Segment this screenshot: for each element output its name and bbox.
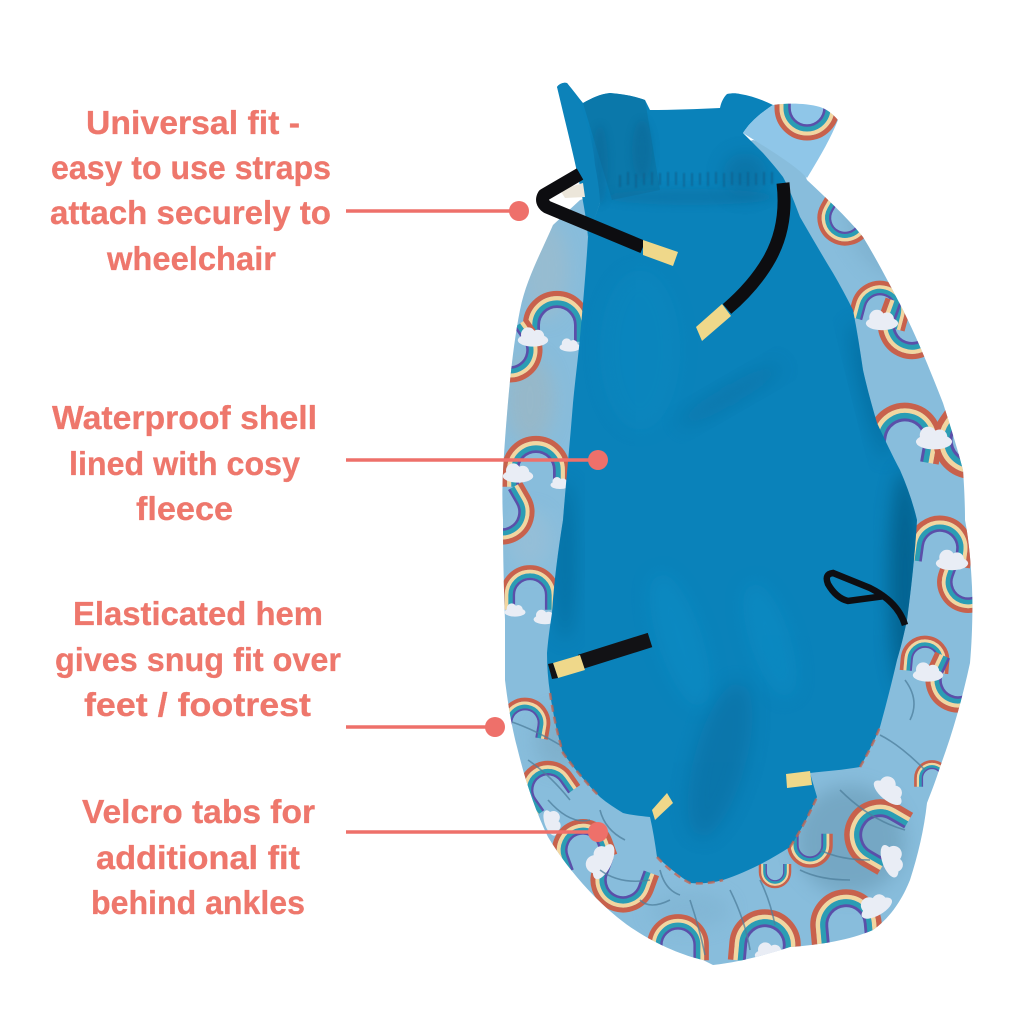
callout: velcro tabs <box>82 793 608 921</box>
pointer line <box>346 717 505 737</box>
top right shell tip <box>743 104 838 178</box>
callout text: Waterproof shell <box>52 399 317 436</box>
callout text <box>50 104 331 277</box>
fleece lining <box>547 83 917 883</box>
strap: upper left <box>543 174 678 266</box>
strap: upper right <box>696 183 784 341</box>
callout text: attach securely to <box>50 194 331 231</box>
panel: wheelchair cosy product photo <box>502 82 972 965</box>
pointer line <box>346 822 608 842</box>
pointer line <box>346 201 529 221</box>
callout: waterproof shell <box>52 399 608 527</box>
callout text: gives snug fit over <box>55 641 341 678</box>
gathered elastic hem folds <box>512 680 925 955</box>
callout text: Universal fit - <box>86 104 300 141</box>
callout text: fleece <box>136 490 233 527</box>
callout text: behind ankles <box>91 884 305 921</box>
callout text <box>55 595 341 723</box>
callout text <box>82 793 315 921</box>
callout text <box>52 399 317 527</box>
callout text: wheelchair <box>106 240 276 277</box>
pointer line <box>346 450 608 470</box>
left fleece ear highlight <box>557 83 600 237</box>
callout text: easy to use straps <box>51 149 331 186</box>
fleece shading and folds <box>555 93 921 844</box>
callout text: Velcro tabs for <box>82 793 315 830</box>
callout text: Elasticated hem <box>73 595 323 632</box>
callout text: additional fit <box>96 839 300 876</box>
velcro tab: lower left <box>652 793 673 820</box>
callout text: feet / footrest <box>84 686 311 723</box>
strap loop: right <box>827 573 905 625</box>
hem trim along fleece bottom <box>550 693 880 883</box>
callout text: lined with cosy <box>69 445 301 482</box>
strap backing scrap <box>560 183 585 198</box>
velcro strap: left <box>548 640 650 679</box>
callout: universal fit <box>50 104 529 277</box>
velcro tab: lower right <box>786 771 812 788</box>
elastic gathers at top of fleece <box>620 172 772 188</box>
waterproof rainbow shell <box>502 140 972 965</box>
callout: elasticated hem <box>55 595 505 737</box>
